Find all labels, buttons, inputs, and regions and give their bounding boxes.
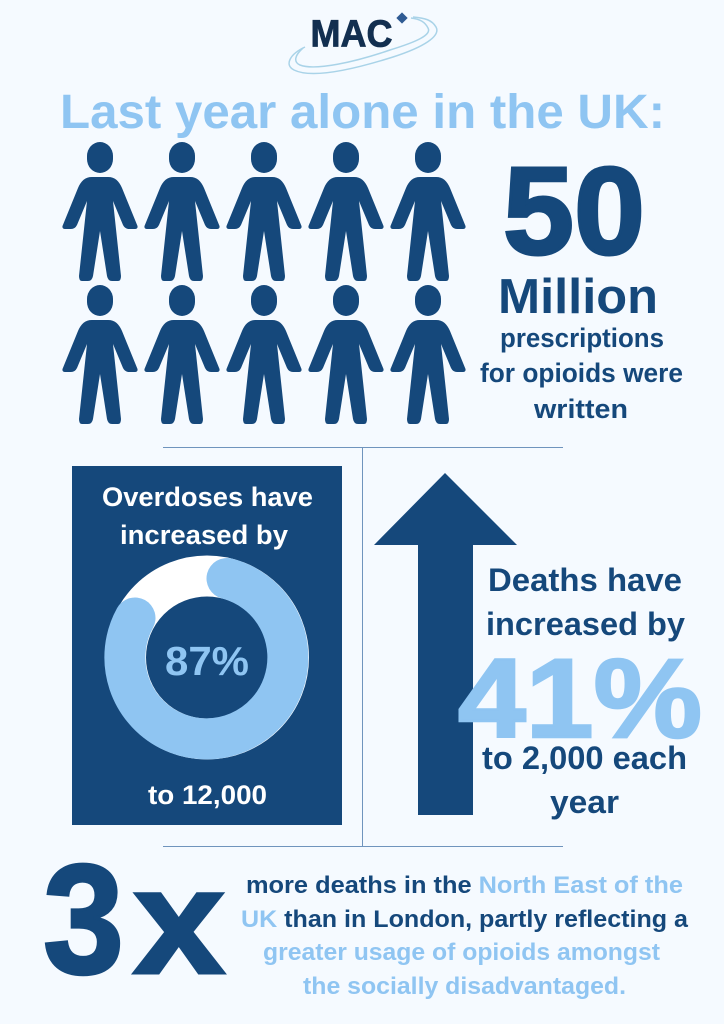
caption: to 12,000: to 12,000 [148, 780, 267, 810]
stat: 3x [43, 833, 225, 1007]
stat: 50 million prescriptions: prescriptions [500, 323, 664, 353]
text block: regional deaths: more deaths in the North East of the [246, 872, 683, 899]
stat: 50 million prescriptions: written [533, 394, 628, 424]
arrow: upward [374, 473, 517, 815]
heading: overdoses have increased by: increased by [120, 520, 288, 550]
stat: 50 million prescriptions: for opioids were [480, 358, 683, 388]
text block: regional deaths: the socially disadvantaged. [303, 973, 626, 1000]
stat: deaths increased 41%: increased by [486, 606, 685, 642]
logo: MAC [289, 12, 437, 73]
panel: overdoses [72, 466, 342, 825]
stat: 3x: x [133, 837, 225, 1005]
text block: regional deaths [241, 872, 689, 1000]
text block: regional deaths: greater usage of opioids amongst [263, 939, 660, 966]
stat: 50 million prescriptions [480, 143, 683, 424]
donut chart: 87% [125, 576, 288, 739]
text block: regional deaths: UK than in London, partly reflecting a [241, 906, 689, 933]
stat: 3x: 3 [43, 833, 124, 1007]
stat: 50 million prescriptions: 50 [503, 143, 645, 281]
heading: overdoses have increased by: Overdoses have [102, 482, 313, 512]
logo: MAC: MAC [310, 14, 392, 56]
stat: deaths increased 41%: Deaths have [488, 562, 682, 598]
stat: deaths increased 41%: 41% [458, 636, 702, 761]
icon group: ten people [62, 142, 466, 424]
donut chart: 87%: 87% [165, 638, 249, 684]
stat: deaths increased 41%: to 2,000 each [482, 740, 687, 776]
title: Last year alone in the UK: [60, 86, 665, 139]
stat: 50 million prescriptions: Million [498, 270, 658, 324]
stat: deaths increased 41% [458, 562, 702, 820]
heading: overdoses have increased by [102, 482, 313, 550]
stat: deaths increased 41%: year [550, 784, 619, 820]
